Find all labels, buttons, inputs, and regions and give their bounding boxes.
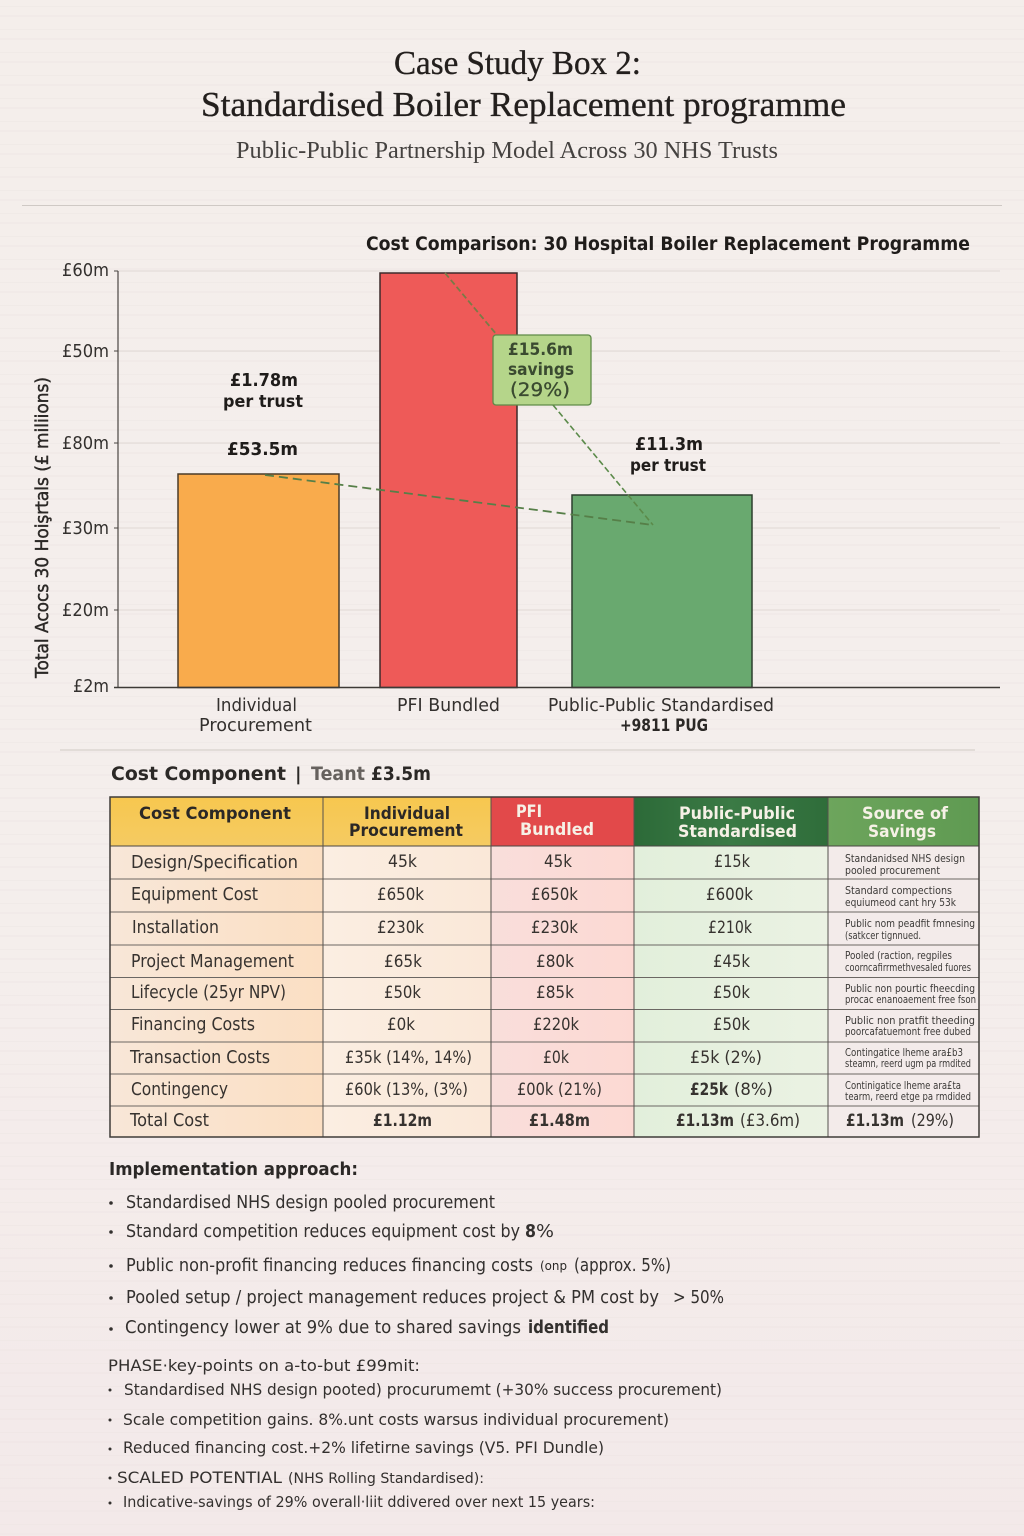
column: source of savings: (29%)	[911, 1111, 954, 1130]
row labels: Project Management	[131, 952, 294, 972]
phase key points: (NHS Rolling Standardised):	[288, 1471, 484, 1487]
implementation bullet list: Standardised NHS design pooled procurement	[126, 1193, 495, 1213]
column: source of savings	[845, 852, 976, 1130]
column: PFI bundled values: £1.48m	[529, 1111, 590, 1130]
column: individual procurement values: 45k	[388, 852, 417, 871]
table header row: Procurement	[349, 821, 463, 841]
bar: public-public standardised	[572, 495, 752, 688]
label: public-public per trust	[630, 434, 706, 475]
category labels	[199, 696, 774, 736]
column: source of savings: poorcafatuemont free dubed	[845, 1025, 971, 1038]
implementation bullet list: (onp	[540, 1259, 567, 1273]
table header row: Cost Component	[139, 804, 291, 824]
callout: savings: (29%)	[510, 380, 570, 401]
column: PFI bundled values: £80k	[536, 952, 574, 971]
column: public-public standardised values: (£3.6m)	[740, 1111, 800, 1130]
implementation bullet list	[109, 1193, 724, 1338]
row labels: Equipment Cost	[131, 885, 258, 905]
y axis labels: £80m	[62, 434, 109, 454]
callout: savings: £15.6m	[508, 340, 573, 359]
implementation bullet list: Standard competition reduces equipment cost by	[126, 1222, 520, 1242]
table heading	[111, 763, 431, 785]
column: public-public standardised values: £600k	[706, 885, 753, 904]
category labels: Public-Public Standardised	[548, 696, 774, 716]
column: individual procurement values: £65k	[384, 952, 422, 971]
label: individual per trust: £1.78m	[230, 370, 298, 391]
phase key points: Standardised NHS design pooted) procurumemt (+30% success procurement)	[124, 1380, 722, 1399]
bar: PFI bundled	[380, 273, 517, 688]
column: public-public standardised values: £50k	[713, 983, 750, 1002]
chart title: Cost Comparison: 30 Hospital Boiler Replacement Programme	[366, 233, 970, 255]
y axis labels: £2m	[73, 677, 109, 697]
column: individual procurement values: £50k	[384, 983, 421, 1002]
column: source of savings: Pooled (raction, regpiles	[845, 949, 952, 962]
column: source of savings: Contingatice lheme ara£b3	[845, 1046, 963, 1059]
column: public-public standardised values: £45k	[713, 952, 750, 971]
table header row: PFI	[516, 802, 542, 822]
callout: savings: savings	[508, 360, 574, 379]
column: source of savings: (satkcer tignnued.	[845, 929, 921, 942]
row labels	[129, 853, 298, 1131]
table header row: Source of	[862, 804, 949, 824]
column: source of savings: Public non pourtic fheecding	[845, 982, 975, 995]
table body fills	[110, 846, 979, 1137]
column: PFI bundled values: £0k	[543, 1048, 569, 1067]
column: source of savings: steamn, reerd ugm pa rmdited	[845, 1057, 971, 1070]
y axis labels: £30m	[62, 519, 109, 539]
column: PFI bundled values: £650k	[531, 885, 578, 904]
phase key points: Reduced financing cost.+2% lifetirne savings (V5. PFI Dundle)	[123, 1438, 604, 1457]
row labels: Contingency	[131, 1080, 228, 1100]
table heading: Cost Component	[111, 763, 286, 785]
column: individual procurement values: £35k (14%, 14%)	[345, 1048, 472, 1067]
column: source of savings: Standard compections	[845, 884, 952, 897]
phase key points: PHASE·key-points on a-to-but £99mit:	[108, 1356, 420, 1375]
column: source of savings: pooled procurement	[845, 864, 941, 877]
column: public-public standardised values: (8%)	[734, 1080, 773, 1099]
column: PFI bundled values: 45k	[544, 852, 572, 871]
implementation bullet list: Public non-profit financing reduces financing costs	[126, 1256, 533, 1276]
column: source of savings: equiumeod cant hry 53k	[845, 896, 957, 909]
column: source of savings: Standanidsed NHS design	[845, 852, 965, 865]
column: individual procurement values: £650k	[377, 885, 424, 904]
column: source of savings: tearm, reerd etge pa rmdided	[845, 1090, 971, 1103]
y axis labels	[62, 261, 109, 697]
column: public-public standardised values: £5k (2%)	[690, 1048, 762, 1067]
column: PFI bundled values: £85k	[536, 983, 574, 1002]
row labels: Transaction Costs	[129, 1048, 270, 1068]
column: PFI bundled values: £220k	[533, 1015, 579, 1034]
row labels: Total Cost	[129, 1111, 209, 1131]
implementation bullet list: Pooled setup / project management reduces project & PM cost by	[126, 1288, 659, 1308]
row labels: Installation	[132, 918, 219, 938]
table header row: Standardised	[678, 822, 797, 842]
category labels: Procurement	[199, 716, 312, 736]
column: individual procurement values: £60k (13%, (3%)	[345, 1080, 468, 1099]
column: source of savings: Public non pratfit theeding	[845, 1014, 975, 1027]
dashed savings connectors	[265, 273, 653, 525]
implementation heading: Implementation approach:	[109, 1159, 358, 1180]
title	[201, 45, 846, 124]
y axis labels: £20m	[62, 601, 109, 621]
bar: individual procurement	[178, 474, 339, 688]
column: public-public standardised values	[676, 852, 800, 1130]
implementation bullet list: Contingency lower at 9% due to shared savings	[125, 1318, 521, 1338]
column: individual procurement values: £1.12m	[373, 1111, 432, 1130]
category labels: +9811 PUG	[620, 716, 708, 735]
table header row: Individual	[364, 804, 450, 824]
title: Standardised Boiler Replacement programme	[201, 85, 846, 124]
title: Case Study Box 2:	[394, 45, 641, 82]
label: public-public per trust: per trust	[630, 456, 706, 475]
column: individual procurement values: £230k	[377, 918, 424, 937]
column: source of savings: coorncafirrmethvesaled fuores	[845, 961, 971, 974]
column: individual procurement values: £0k	[387, 1015, 415, 1034]
table header row: Public-Public	[679, 804, 795, 824]
implementation bullet list: 8	[525, 1222, 536, 1242]
column: PFI bundled values	[517, 852, 602, 1130]
table: cost components	[110, 797, 979, 1137]
column: public-public standardised values: £210k	[708, 918, 752, 937]
implementation bullet list: > 50%	[673, 1288, 724, 1308]
column: source of savings: Public nom peadfit fmnesing	[845, 917, 975, 930]
category labels: PFI Bundled	[397, 696, 500, 716]
column: source of savings: £1.13m	[846, 1111, 904, 1130]
column: individual procurement values	[345, 852, 472, 1130]
column: source of savings: procac enanoaement free fson	[845, 993, 976, 1006]
implementation bullet list: %	[536, 1222, 554, 1242]
phase key points	[108, 1356, 722, 1511]
chart: cost comparison	[33, 233, 1000, 736]
label: individual per trust	[223, 370, 303, 411]
implementation bullet list: identified	[528, 1318, 609, 1338]
table heading: Teant	[311, 763, 365, 785]
column: public-public standardised values: £15k	[714, 852, 750, 871]
subtitle: Public-Public Partnership Model Across 30 NHS Trusts	[236, 138, 778, 164]
table heading: |	[295, 764, 302, 785]
callout: savings	[493, 335, 591, 405]
y axis title: Total Acocs 30 Hoişrtals (£ miliions)	[33, 377, 53, 679]
table header row	[110, 797, 979, 846]
phase key points: SCALED POTENTIAL	[117, 1468, 282, 1487]
label: public-public per trust: £11.3m	[635, 434, 703, 455]
label: individual total: £53.5m	[227, 439, 298, 460]
table header row: Savings	[868, 822, 936, 842]
column: source of savings: Continigatice lheme ara£ta	[845, 1079, 961, 1092]
phase key points: Scale competition gains. 8%.unt costs warsus individual procurement)	[123, 1410, 669, 1429]
implementation bullet list: (approx. 5%)	[574, 1256, 671, 1276]
column: public-public standardised values: £1.13m	[676, 1111, 734, 1130]
column: PFI bundled values: £00k (21%)	[517, 1080, 602, 1099]
column: PFI bundled values: £230k	[531, 918, 578, 937]
label: individual per trust: per trust	[223, 392, 303, 411]
y axis labels: £50m	[62, 342, 109, 362]
phase key points: Indicative-savings of 29% overall·liit ddivered over next 15 years:	[123, 1493, 595, 1511]
row labels: Financing Costs	[131, 1015, 255, 1035]
column: public-public standardised values: £25k	[690, 1080, 729, 1099]
category labels: Individual	[216, 696, 297, 716]
table heading: £3.5m	[371, 763, 431, 785]
row labels: Design/Specification	[131, 853, 298, 873]
table header row: Bundled	[520, 820, 594, 840]
row labels: Lifecycle (25yr NPV)	[131, 983, 286, 1003]
y axis labels: £60m	[62, 261, 109, 281]
column: public-public standardised values: £50k	[713, 1015, 750, 1034]
axes	[114, 271, 1000, 688]
